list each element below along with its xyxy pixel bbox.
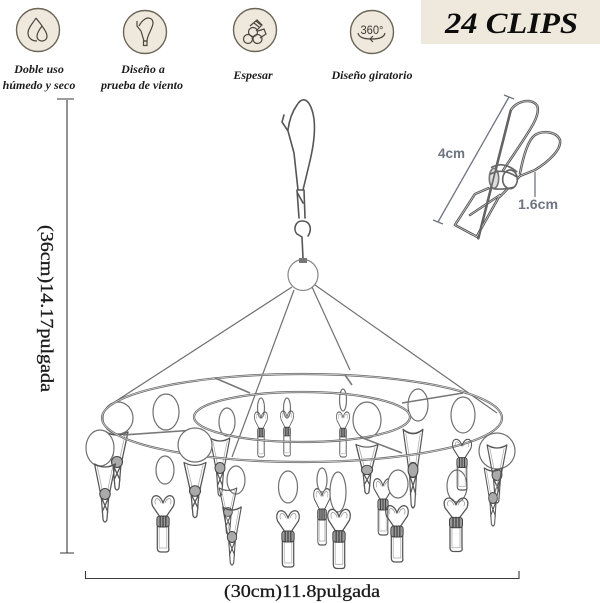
width label: (30cm)11.8pulgada — [224, 581, 380, 601]
clip illustration — [455, 101, 560, 238]
icon: water drops — [16, 8, 60, 52]
feature label: diseño a prueba de viento: prueba de viento — [100, 78, 183, 92]
feature label: espesar: Espesar — [232, 68, 273, 82]
back clips — [103, 389, 475, 545]
outer ring rail — [102, 374, 502, 462]
vertical dimension line — [57, 99, 74, 553]
title banner: 24 CLIPS: 24 CLIPS — [444, 7, 578, 40]
feature label: doble uso: Doble uso — [13, 62, 64, 76]
label 4cm: 4cm — [438, 146, 465, 161]
icon: 360 degree rotation — [350, 10, 394, 54]
back row clips — [254, 412, 268, 457]
front clips — [95, 464, 115, 522]
icon: thick rods — [234, 8, 276, 52]
hub ring — [288, 260, 318, 290]
back row clip rings — [258, 398, 264, 418]
title banner: 24 CLIPS — [421, 0, 600, 44]
feature label: doble uso: húmedo y seco — [3, 78, 75, 92]
horizontal dimension line — [85, 571, 519, 579]
knot — [299, 258, 307, 263]
inner ring rail — [194, 392, 410, 442]
front clip rings — [86, 430, 114, 466]
large rings — [103, 402, 133, 434]
support rods — [113, 285, 497, 457]
hanging rack — [86, 100, 515, 569]
icon: 360 degree rotation: 360° — [360, 25, 384, 37]
icon: windproof hook — [124, 10, 166, 54]
label 1.6cm: 1.6cm — [518, 197, 558, 212]
feature label: diseño a prueba de viento: Diseño a — [120, 62, 165, 76]
clip size line 4cm — [433, 95, 514, 224]
height label: (36cm)14.17pulgada — [37, 225, 57, 392]
front clips — [86, 428, 515, 568]
clip size line 1.6cm — [534, 172, 536, 197]
feature label: diseño giratorio: Diseño giratorio — [330, 68, 413, 82]
hook — [282, 100, 315, 258]
connecting spokes — [123, 375, 463, 453]
clip detail inset — [433, 95, 560, 238]
